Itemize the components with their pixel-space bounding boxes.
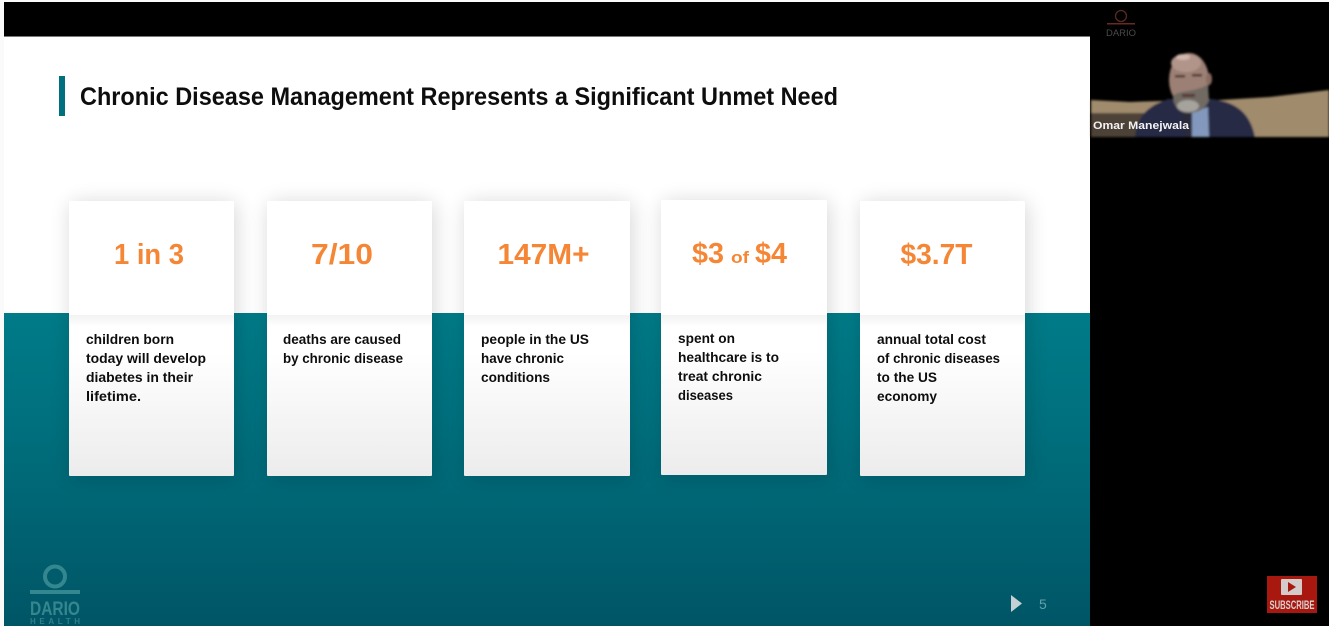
card: 7/10: 7/10 [311,239,373,271]
title [59,76,838,116]
logo: Dario Health [30,566,80,626]
title: Chronic Disease Management Represents a Significant Unmet Need [80,83,838,111]
card: 1 in 3: today will develop [86,350,206,366]
page number: 5 [1039,596,1047,612]
card: 1 in 3: diabetes in their [86,369,194,385]
card: $3 of $4: healthcare is to [678,349,779,365]
card: 147M+ [464,201,632,478]
card: 147M+: conditions [481,369,550,385]
faint Dario logo over webcam: DARIO [1106,28,1136,38]
card: 1 in 3: lifetime. [86,388,141,404]
card: 147M+: 147M+ [498,239,590,271]
card: 7/10: by chronic disease [283,350,403,366]
card: $3 of $4: $4 [755,238,787,270]
card: 1 in 3: 1 in 3 [114,239,184,271]
card: $3 of $4: diseases [678,387,733,403]
logo: Dario Health: DARIO [30,599,80,620]
card: $3 of $4: spent on [678,330,735,346]
subscribe button [1267,576,1317,613]
card: $3.7T: economy [877,388,937,404]
card: $3.7T: $3.7T [900,239,973,271]
beard [1173,84,1209,113]
card: 147M+: people in the US [481,331,589,347]
card: $3 of $4: $3 [692,238,724,270]
card: $3.7T: of chronic diseases [877,350,1000,366]
speaker name label: Omar Manejwala [1093,120,1190,132]
card: 7/10: deaths are caused [283,331,401,347]
card: $3.7T: to the US [877,369,937,385]
card: 1 in 3: children born [86,331,174,347]
ear [1206,73,1212,85]
card: 7/10 [267,201,434,478]
card: $3.7T: annual total cost [877,331,986,347]
card: 1 in 3 [69,201,236,478]
card: 147M+: have chronic [481,350,564,366]
shirt [1190,107,1209,137]
logo: Dario Health: HEALTH [30,617,80,626]
name label backdrop [1091,113,1190,137]
webcam video: speaker [1091,53,1329,137]
eyes and mouth [1175,75,1185,78]
card: $3 of $4: treat chronic [678,368,762,384]
jacket [1135,99,1255,137]
icon: next slide arrow [1011,595,1022,612]
head [1169,53,1209,107]
faint Dario logo over webcam [1106,10,1136,38]
card: $3.7T [860,201,1027,478]
neck shadow and tie [1182,113,1192,137]
card: $3 of $4 [661,200,829,477]
couch [1091,90,1329,137]
card: $3 of $4: of [731,248,749,267]
